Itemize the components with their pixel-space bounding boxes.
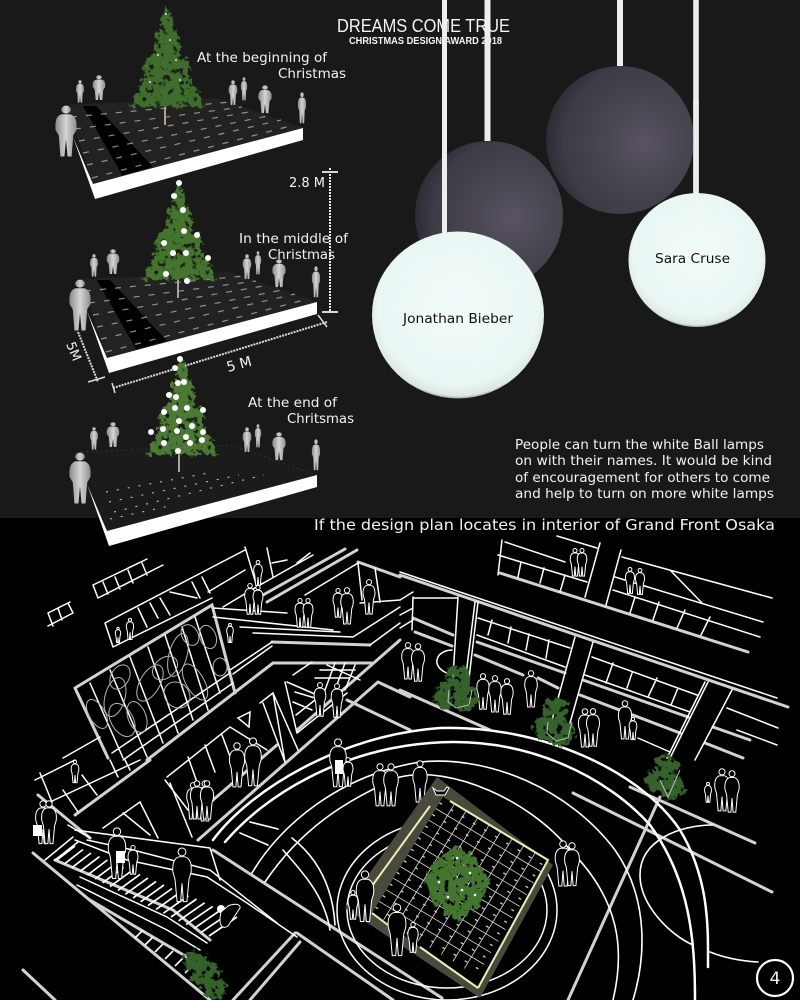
- dimension: 2.8 M height: 2.8 M: [289, 175, 325, 191]
- tree: beginning of Christmas: [129, 5, 205, 125]
- dimension: 5 M depth: 5M: [62, 340, 84, 364]
- thick grey structural beams: [23, 549, 788, 1000]
- top background panel: [0, 0, 800, 518]
- lit lamp: Jonathan Bieber: Jonathan Bieber: [402, 312, 514, 327]
- people: end of Christmas: [69, 422, 320, 503]
- tree: end of Christmas: [146, 355, 218, 472]
- cord over left dark lamp: [442, 130, 447, 234]
- people: middle of Christmas: [69, 249, 320, 330]
- shrub: centre column: [533, 697, 575, 747]
- page number badge: [757, 960, 793, 996]
- lit lamp: Sara Cruse: Sara Cruse: [655, 252, 730, 267]
- subtitle: CHRISTMAS DESIGN AWARD 2018: [349, 35, 502, 47]
- description text: [515, 438, 774, 502]
- caption: end: [248, 396, 354, 427]
- caption: middle: [239, 232, 348, 263]
- caption: beginning: [197, 51, 346, 82]
- thin white lines: [48, 547, 400, 760]
- interior sketch: people: [33, 549, 739, 927]
- caption: end: At the end of: [248, 396, 337, 411]
- lit lamp: Jonathan Bieber: [372, 232, 544, 398]
- description text: and help to turn on more white lamps: [515, 487, 774, 502]
- cord over dark lamp: [693, 100, 699, 195]
- shrub: escalator: [183, 950, 226, 999]
- platform: beginning of Christmas: [67, 98, 303, 199]
- lit lamp: Sara Cruse: [628, 193, 766, 327]
- dimension: 5 M width: [112, 315, 327, 393]
- platform grid: [372, 797, 548, 976]
- description text: of encouragement for others to come: [515, 471, 770, 486]
- dimension: 5 M width: 5 M: [225, 354, 254, 376]
- dimension: 5 M depth: [62, 332, 105, 382]
- people and dog around platform: [348, 787, 579, 956]
- section heading: If the design plan locates in interior of Grand Front Osaka: [314, 516, 775, 534]
- tree from above: [423, 846, 490, 920]
- description text: on with their names. It would be kind: [515, 454, 772, 469]
- shrub: right column: [645, 754, 685, 800]
- interior sketch: structure lines: [23, 536, 788, 1000]
- platform: middle of Christmas: [81, 272, 317, 373]
- caption: beginning: Christmas: [278, 67, 346, 82]
- rotunda arcs: [213, 728, 708, 1000]
- escalator steps: [57, 846, 237, 936]
- page number badge: 4: [770, 969, 780, 989]
- dark ball lamp right: [546, 66, 694, 214]
- caption: beginning: At the beginning of: [197, 51, 327, 66]
- lower stair steps: [135, 930, 193, 973]
- dark ball lamp left: [415, 141, 563, 289]
- column base outlines: [448, 690, 680, 797]
- hanging cords: [444, 0, 696, 234]
- caption: middle: Christmas: [268, 248, 335, 263]
- people: beginning of Christmas: [55, 75, 306, 156]
- caption: end: Chritsmas: [287, 412, 354, 427]
- bottom background panel: [0, 518, 800, 1000]
- tree: middle of Christmas: [141, 180, 217, 298]
- shrub: left column: [434, 665, 478, 711]
- platform: end of Christmas: [81, 445, 317, 546]
- description text: People can turn the white Ball lamps: [515, 438, 764, 453]
- caption: middle: In the middle of: [239, 232, 348, 247]
- dimension: 2.8 M height: [289, 168, 338, 312]
- central Christmas tree platform (top view): [345, 777, 579, 998]
- window ellipses: [82, 621, 227, 741]
- title: DREAMS COME TRUE: [337, 15, 510, 36]
